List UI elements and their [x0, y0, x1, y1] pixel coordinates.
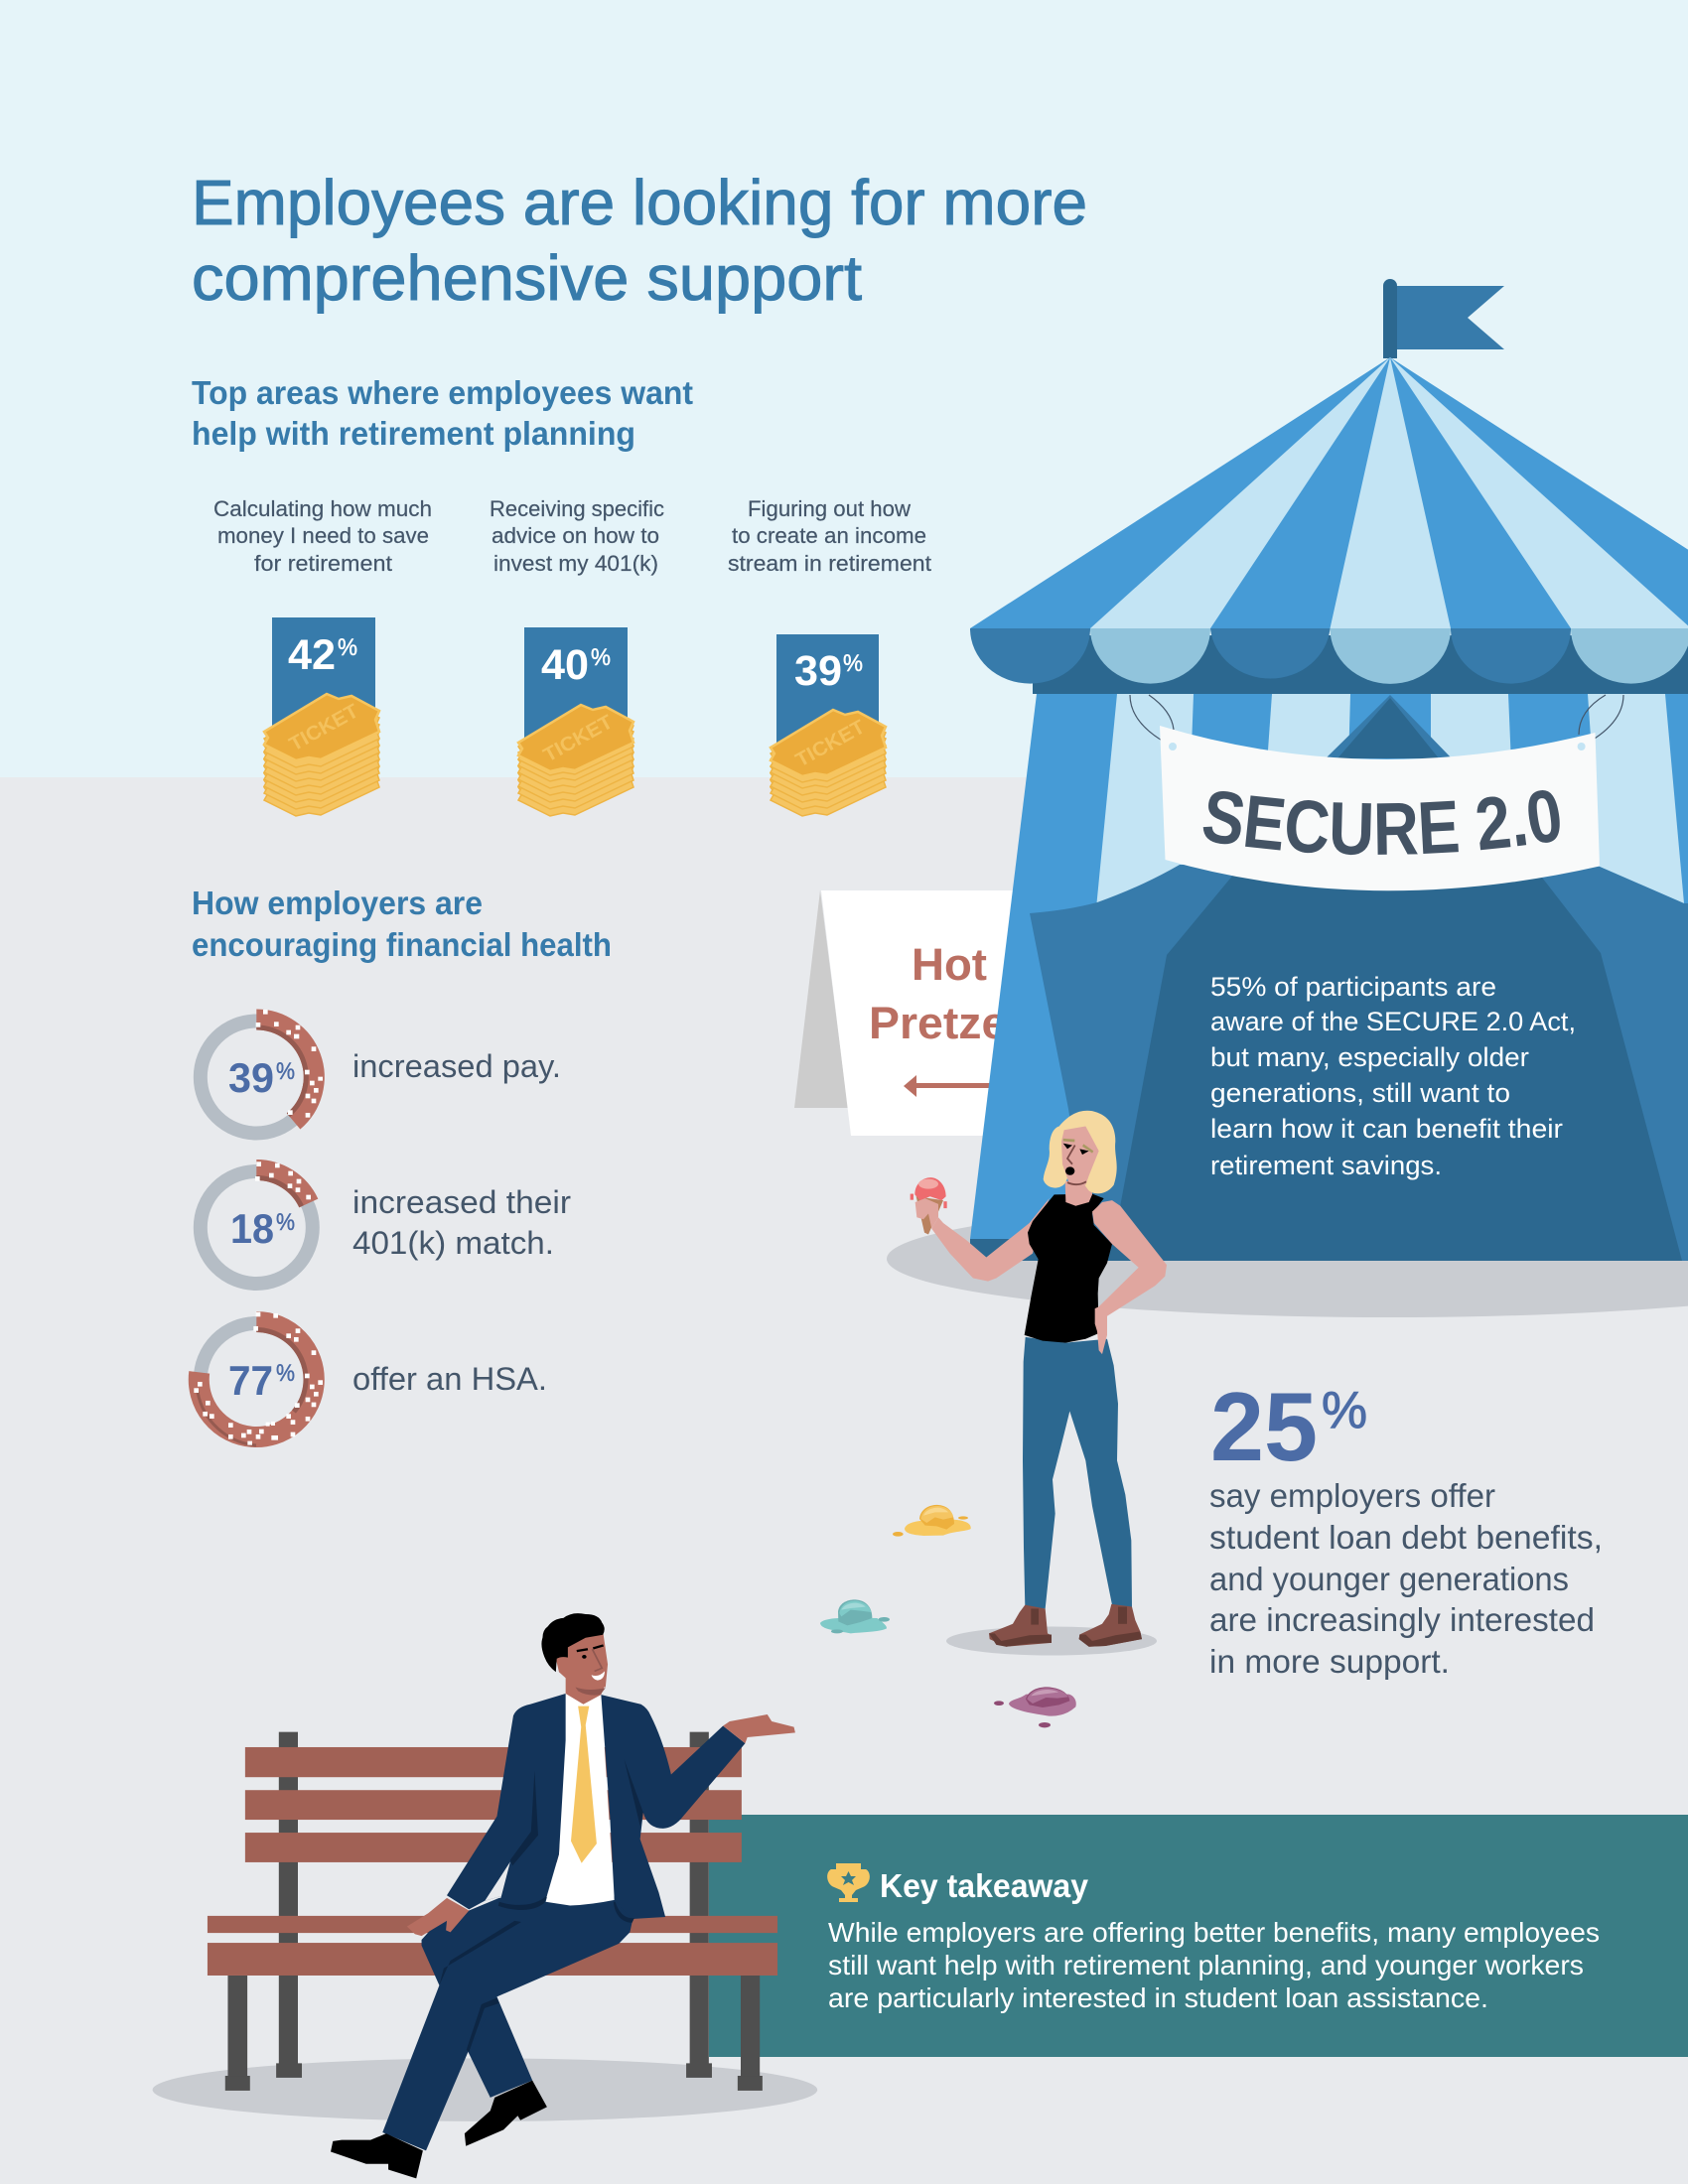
statistic text: student loan debt benefits, — [1209, 1519, 1603, 1556]
bench shadow — [153, 2058, 817, 2121]
label: column 3 — [728, 496, 931, 576]
sign: hot pretzels: Pretzels — [869, 998, 1046, 1048]
tent text: learn how it can benefit their — [1210, 1114, 1563, 1144]
column 1: calculating how much — [213, 496, 432, 816]
tent roof — [970, 357, 1688, 694]
value: 39% — [794, 647, 863, 695]
icon: ticket stack: TICKET — [286, 700, 362, 755]
statistic text: in more support. — [1209, 1643, 1450, 1680]
title — [192, 167, 1087, 314]
value: 40% — [541, 641, 611, 689]
donut chart: 18% increased match: 18 — [230, 1205, 274, 1252]
tent text: 55% of participants are — [1210, 972, 1496, 1002]
takeaway text — [828, 1917, 1600, 2013]
tent shadow — [887, 1200, 1688, 1317]
value: 42% — [288, 631, 357, 679]
value: 42%: % — [338, 634, 357, 661]
donut chart: 39% increased pay: % — [276, 1058, 295, 1085]
label: column 2 — [490, 496, 664, 576]
tent text: retirement savings. — [1210, 1151, 1442, 1180]
label: increased their 401(k) match: 401(k) match. — [352, 1225, 554, 1261]
takeaway text: While employers are offering better benefits, many employees — [828, 1917, 1600, 1948]
icon: trophy — [827, 1863, 870, 1902]
puddle: purple — [994, 1687, 1076, 1727]
icon: ticket stack: TICKET — [792, 716, 869, 771]
man on bench — [153, 1613, 817, 2178]
column 3: figuring out income stream — [728, 496, 931, 816]
takeaway text: still want help with retirement planning, and younger workers — [828, 1950, 1584, 1980]
tent body — [970, 694, 1688, 1261]
sign: hot pretzels — [794, 890, 1046, 1136]
bench — [208, 1732, 777, 2091]
value: 40%: 40 — [541, 641, 589, 689]
label: column 2: Receiving specific — [490, 496, 664, 521]
donut chart: 18% increased match — [201, 1161, 313, 1284]
heading: top areas: help with retirement planning — [192, 415, 635, 452]
tent text: aware of the SECURE 2.0 Act, — [1210, 1007, 1576, 1036]
icon: ticket stack — [264, 694, 379, 816]
column 2: receiving specific advice — [490, 496, 664, 816]
banner: SECURE 2.0 — [1203, 790, 1560, 856]
banner strings — [1130, 695, 1623, 747]
icon: ticket stack — [518, 705, 633, 816]
value: 42%: 42 — [288, 631, 336, 679]
heading: how employers: encouraging financial health — [192, 926, 612, 963]
label: increased their 401(k) match — [352, 1184, 571, 1261]
heading: how employers — [192, 885, 612, 963]
heading: key takeaway: Key takeaway — [880, 1867, 1089, 1904]
value: 40%: % — [591, 644, 611, 671]
bar: 40% — [524, 627, 628, 751]
tent flag — [1383, 279, 1504, 358]
statistic text: are increasingly interested — [1209, 1601, 1595, 1638]
statistic text — [1209, 1477, 1603, 1680]
label: column 1: Calculating how much — [213, 496, 432, 521]
heading: top areas: Top areas where employees want — [192, 374, 693, 411]
title: Employees are looking for more — [192, 167, 1087, 238]
label: column 1: money I need to save — [217, 523, 429, 548]
label: increased their 401(k) match: increased their — [352, 1184, 571, 1220]
tent text: generations, still want to — [1210, 1078, 1510, 1108]
label: column 3: stream in retirement — [728, 551, 931, 576]
banner — [1160, 726, 1600, 891]
donut chart: 39% increased pay: 39 — [228, 1054, 274, 1101]
label: column 1 — [213, 496, 432, 576]
value: 39%: 39 — [794, 647, 842, 695]
tent text: but many, especially older — [1210, 1042, 1529, 1072]
statistic text: and younger generations — [1209, 1561, 1569, 1597]
statistic: 25%: % — [1322, 1382, 1367, 1439]
label: column 2: invest my 401(k) — [493, 551, 658, 576]
donut chart: 18% increased match: % — [276, 1209, 295, 1236]
tent: SECURE 2.0 — [970, 279, 1688, 1261]
label: increased pay: increased pay. — [352, 1048, 561, 1084]
panel: key takeaway — [709, 1815, 1688, 2057]
heading: how employers: How employers are — [192, 885, 483, 921]
takeaway text: are particularly interested in student loan assistance. — [828, 1982, 1488, 2013]
statistic: 25%: 25 — [1210, 1372, 1318, 1481]
value: 39%: % — [843, 650, 863, 677]
melted ice cream puddles — [820, 1505, 1076, 1727]
puddle: teal — [820, 1599, 890, 1633]
background: sky — [0, 0, 1688, 777]
man figure — [331, 1613, 795, 2178]
woman with ice cream — [911, 1111, 1167, 1656]
icon: ticket stack — [771, 710, 886, 816]
heading: top areas — [192, 374, 693, 452]
label: column 3: to create an income — [732, 523, 926, 548]
puddle: yellow — [893, 1505, 971, 1537]
label: column 2: advice on how to — [492, 523, 659, 548]
donut chart: 77% offer an HSA — [194, 1312, 323, 1445]
background: ground — [0, 777, 1688, 2184]
label: offer an HSA: offer an HSA. — [352, 1361, 547, 1397]
label: column 1: for retirement — [254, 551, 392, 576]
statistic text: say employers offer — [1209, 1477, 1495, 1514]
statistic: 25% — [1209, 1372, 1603, 1680]
title: comprehensive support — [192, 242, 862, 314]
tent text — [1210, 972, 1576, 1180]
sign: hot pretzels: Hot — [912, 939, 987, 990]
bar: 39% — [776, 634, 879, 758]
bar: 42% — [272, 617, 375, 742]
icon: ticket stack: TICKET — [540, 711, 617, 766]
donut chart: 77% offer an HSA: % — [276, 1360, 295, 1387]
donut chart: 77% offer an HSA: 77 — [228, 1357, 273, 1404]
donut chart: 39% increased pay — [201, 1010, 323, 1134]
label: column 3: Figuring out how — [748, 496, 911, 521]
